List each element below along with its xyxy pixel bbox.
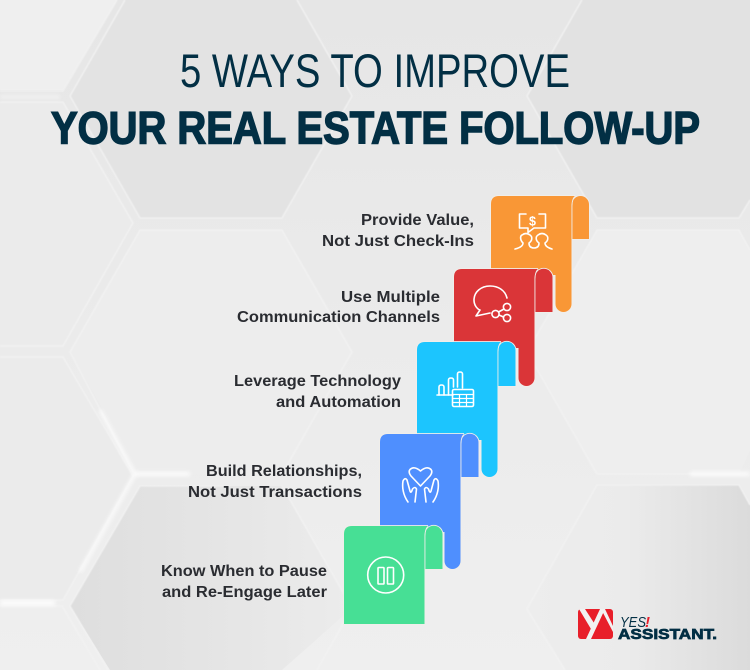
logo wordmark: YES <box>620 614 646 631</box>
logo wordmark <box>618 614 717 643</box>
label: pause and re-engage: Know When to Pause <box>161 563 327 580</box>
label: provide value <box>322 212 474 250</box>
icon: speech bubble with dollar and people <box>515 214 552 249</box>
label: relationships: Build Relationships, <box>206 463 362 480</box>
step 3: cyan scroll <box>417 342 516 477</box>
label: relationships <box>188 463 362 501</box>
label: provide value: Not Just Check-Ins <box>322 233 474 250</box>
icon: speech bubble with dollar and people: $ <box>529 214 536 228</box>
label: pause and re-engage: and Re-Engage Later <box>162 584 327 601</box>
logo wordmark: ! <box>645 614 650 631</box>
title line 1: 5 WAYS TO IMPROVE <box>180 44 570 97</box>
label: relationships: Not Just Transactions <box>188 484 362 501</box>
icon: bar chart and table <box>437 372 474 406</box>
label: pause and re-engage <box>161 563 327 601</box>
label: technology: and Automation <box>276 394 401 411</box>
icon: hands holding heart <box>403 468 438 502</box>
label: technology <box>234 373 401 411</box>
icon: chat bubble with share nodes <box>474 286 511 322</box>
logo mark <box>578 609 613 639</box>
icon: pause button <box>368 557 404 593</box>
step 1: orange scroll <box>491 196 589 312</box>
logo wordmark: ASSISTANT. <box>618 627 717 643</box>
step 2: red scroll <box>454 269 552 386</box>
label: multiple channels: Use Multiple <box>341 289 440 306</box>
label: multiple channels <box>237 289 440 326</box>
label: multiple channels: Communication Channels <box>237 309 440 326</box>
step 5: green scroll <box>344 526 442 624</box>
step 4: blue scroll <box>380 434 478 569</box>
label: provide value: Provide Value, <box>361 212 474 229</box>
label: technology: Leverage Technology <box>234 373 401 390</box>
logo: Yes! Assistant <box>578 609 717 643</box>
title <box>51 44 700 154</box>
